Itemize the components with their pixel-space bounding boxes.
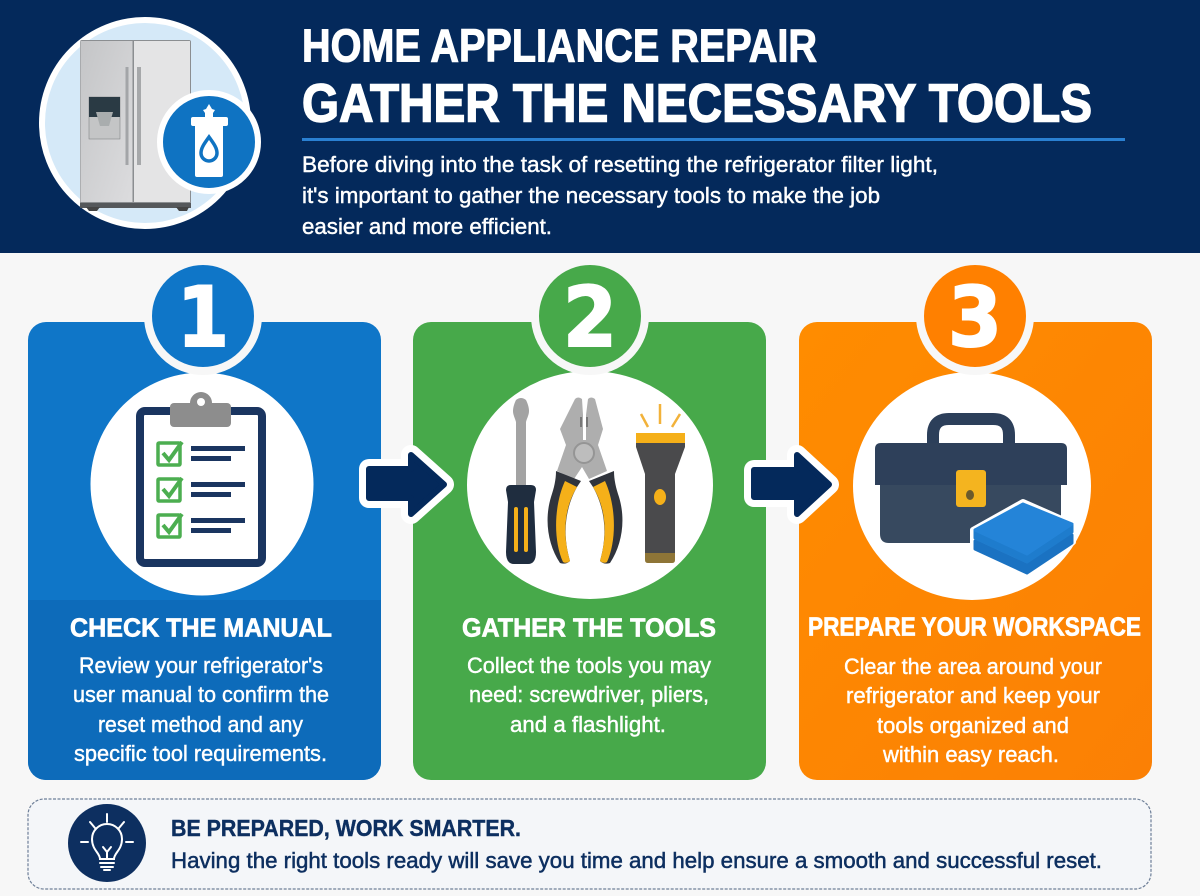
- step 3 description: within easy reach.: [882, 742, 1059, 767]
- step 3 description: tools organized and: [877, 713, 1069, 738]
- panel: step 3 prepare your workspace: [799, 261, 1152, 780]
- step 1 heading: CHECK THE MANUAL: [70, 612, 332, 642]
- icon: light bulb: [68, 804, 146, 882]
- step 2 description: and a flashlight.: [510, 712, 666, 737]
- title: [302, 20, 1092, 134]
- icon: flashlight: [636, 404, 685, 563]
- step 1 description: reset method and any: [98, 712, 304, 737]
- step 3 heading: PREPARE YOUR WORKSPACE: [808, 614, 1141, 642]
- icon: screwdriver: [506, 398, 536, 564]
- step 1 description: specific tool requirements.: [74, 741, 327, 766]
- intro text: easier and more efficient.: [302, 214, 552, 239]
- step 1 description: [73, 653, 329, 766]
- icon: toolbox: [875, 419, 1067, 543]
- step 3 description: [844, 654, 1102, 767]
- panel: step 2 gather the tools: [413, 261, 766, 780]
- title: HOME APPLIANCE REPAIR: [302, 20, 817, 72]
- icon: water filter badge: [160, 93, 258, 191]
- step number 3: 3: [948, 269, 1002, 366]
- callout text: BE PREPARED, WORK SMARTER.: [171, 815, 521, 841]
- step 3 description: refrigerator and keep your: [846, 683, 1100, 708]
- step 2 description: [467, 653, 712, 737]
- step 2 heading: GATHER THE TOOLS: [462, 612, 716, 642]
- step number 2: 2: [563, 269, 617, 366]
- icon: folded blue towels: [973, 502, 1073, 577]
- icon: refrigerator: [42, 20, 248, 226]
- step 1 description: user manual to confirm the: [73, 682, 329, 707]
- header banner: [0, 0, 1200, 253]
- icon: pliers: [548, 398, 622, 564]
- step number 2: [535, 261, 645, 371]
- step 2 description: Collect the tools you may: [467, 653, 712, 678]
- arrow: step 1 to step 2: [369, 455, 444, 514]
- intro text: [302, 152, 938, 239]
- step 2 description: need: screwdriver, pliers,: [469, 682, 709, 707]
- intro text: Before diving into the task of resetting the refrigerator filter light,: [302, 152, 938, 177]
- arrow: step 2 to step 3: [754, 455, 829, 514]
- callout: be prepared: [28, 799, 1151, 889]
- step number 1: 1: [177, 269, 229, 366]
- title: GATHER THE NECESSARY TOOLS: [302, 74, 1092, 134]
- step number 3: [920, 261, 1030, 371]
- icon: clipboard checklist: [140, 392, 262, 563]
- panel: step 1 check the manual: [28, 261, 381, 780]
- intro text: it's important to gather the necessary tools to make the job: [302, 183, 880, 208]
- step 3 description: Clear the area around your: [844, 654, 1102, 679]
- step 1 description: Review your refrigerator's: [79, 653, 323, 678]
- callout text: Having the right tools ready will save you time and help ensure a smooth and successful reset.: [171, 848, 1102, 873]
- step number 1: [148, 261, 258, 371]
- callout text: [171, 815, 1102, 873]
